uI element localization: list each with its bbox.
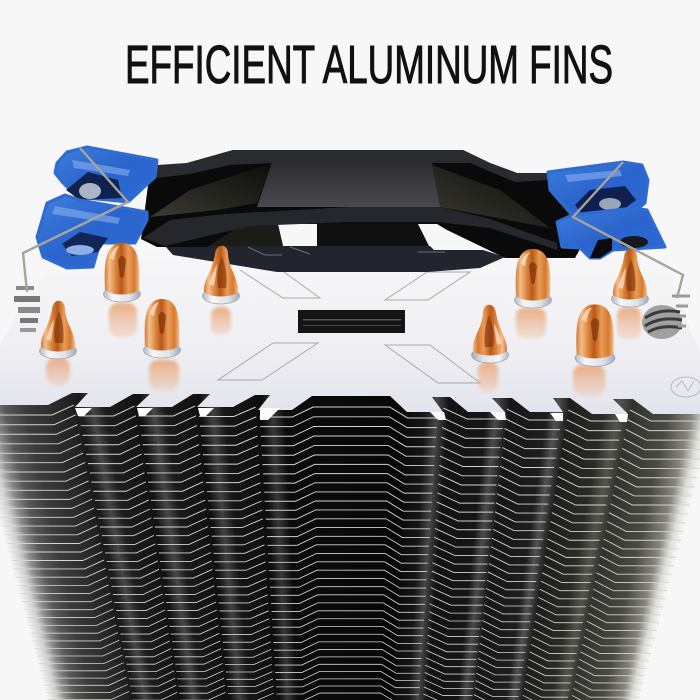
plate stamped outlines <box>218 267 480 383</box>
plate highlights under teeth <box>75 408 628 422</box>
right blue clips <box>548 162 665 258</box>
heat pipe 6 <box>575 304 615 366</box>
left wedge <box>150 163 272 217</box>
frame body <box>141 150 585 258</box>
heatsink fin stack body <box>0 392 700 700</box>
dark plate band below fan <box>165 246 505 272</box>
fan blades behind frame <box>200 224 432 252</box>
heat pipe 2 <box>144 299 180 358</box>
retention wire right <box>573 162 683 298</box>
fin edge highlights <box>0 405 700 700</box>
center panel <box>257 162 440 207</box>
frame top highlight band <box>157 150 549 182</box>
heat pipe 1 <box>104 243 140 302</box>
right wedge <box>432 165 550 228</box>
side fin stacks <box>14 286 690 339</box>
center slot <box>298 310 405 333</box>
fan frame <box>141 150 585 258</box>
heat pipe 4 <box>40 301 76 359</box>
heat pipe 3 <box>202 246 240 304</box>
heat pipe reflections <box>46 303 641 395</box>
logo emboss on plate <box>671 377 700 397</box>
top aluminum plate <box>0 245 700 414</box>
retention wire left <box>23 148 128 292</box>
heat pipe 5 <box>514 249 552 308</box>
lower bar <box>143 207 557 250</box>
heat pipe 8 <box>612 249 648 307</box>
left blue clips <box>37 147 157 268</box>
heat pipe 7 <box>472 305 508 363</box>
plate band notch lines <box>248 247 445 255</box>
